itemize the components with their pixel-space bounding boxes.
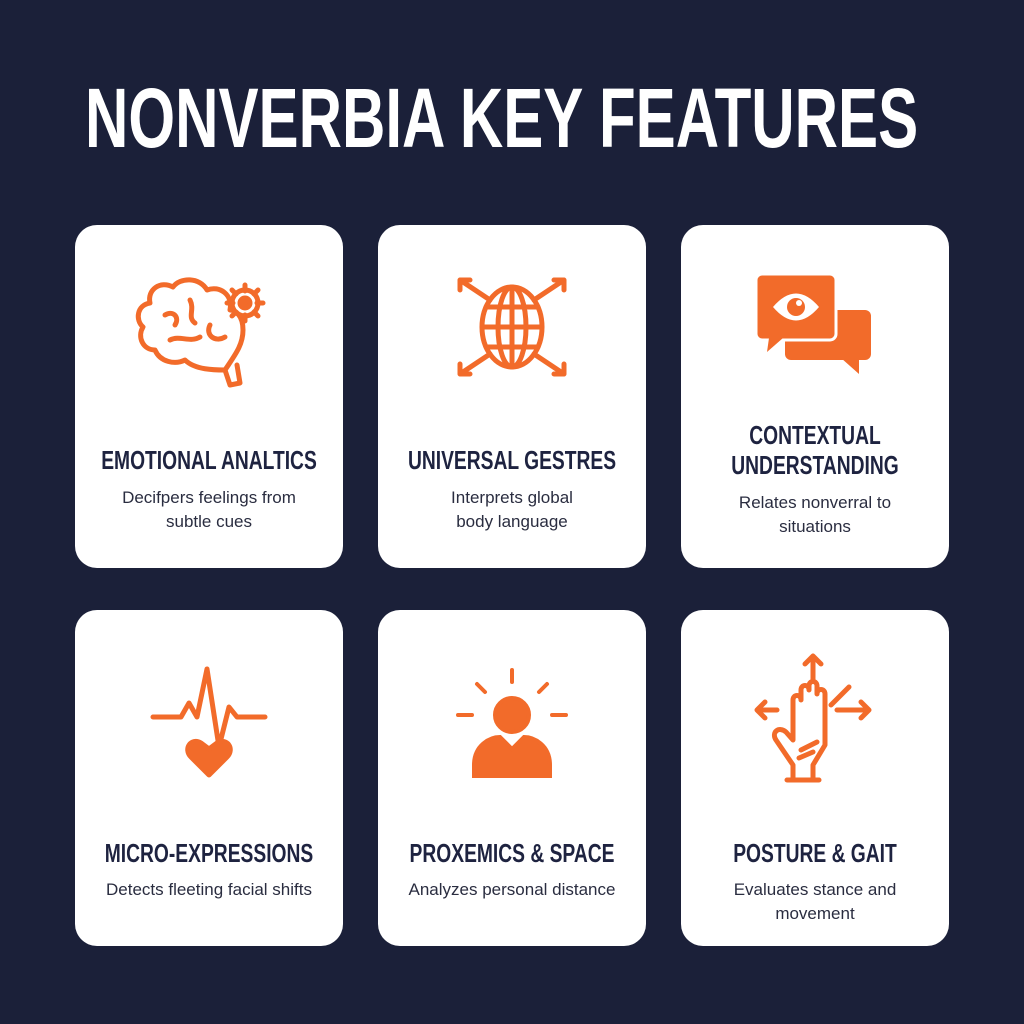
description: Decifpers feelings from <box>122 488 296 507</box>
icon: hand with arrows <box>754 654 872 782</box>
panel: contextual understanding <box>681 225 949 568</box>
heading: POSTURE & GAIT <box>733 838 897 868</box>
heading: MICRO-EXPRESSIONS <box>105 838 313 868</box>
icon: globe with arrows <box>458 278 566 376</box>
panel: universal gestures <box>378 225 646 568</box>
title: NONVERBIA KEY FEATURES <box>85 71 918 165</box>
icon: person radiating <box>456 668 568 778</box>
panel: posture & gait <box>681 610 949 946</box>
panel: micro-expressions <box>75 610 343 946</box>
description: subtle cues <box>166 512 252 531</box>
icon: heartbeat heart <box>150 666 268 778</box>
heading: CONTEXTUAL <box>749 420 881 450</box>
description <box>451 488 573 531</box>
description <box>734 880 896 923</box>
heading: UNDERSTANDING <box>731 450 899 480</box>
description: movement <box>775 904 855 923</box>
description: Detects fleeting facial shifts <box>106 880 312 899</box>
description: situations <box>779 517 851 536</box>
panel: emotional analytics <box>75 225 343 568</box>
heading: UNIVERSAL GESTRES <box>408 445 616 475</box>
icon: brain with gear <box>136 277 266 388</box>
description: body language <box>456 512 568 531</box>
description <box>739 493 891 536</box>
heading: PROXEMICS & SPACE <box>410 838 614 868</box>
heading <box>731 420 899 480</box>
description: Interprets global <box>451 488 573 507</box>
description: Analyzes personal distance <box>409 880 615 899</box>
description: Evaluates stance and <box>734 880 896 899</box>
heading: EMOTIONAL ANALTICS <box>101 445 317 475</box>
description: Relates nonverral to <box>739 493 891 512</box>
icon: speech bubbles with eye <box>758 276 871 374</box>
panel: proxemics & space <box>378 610 646 946</box>
description <box>122 488 296 531</box>
